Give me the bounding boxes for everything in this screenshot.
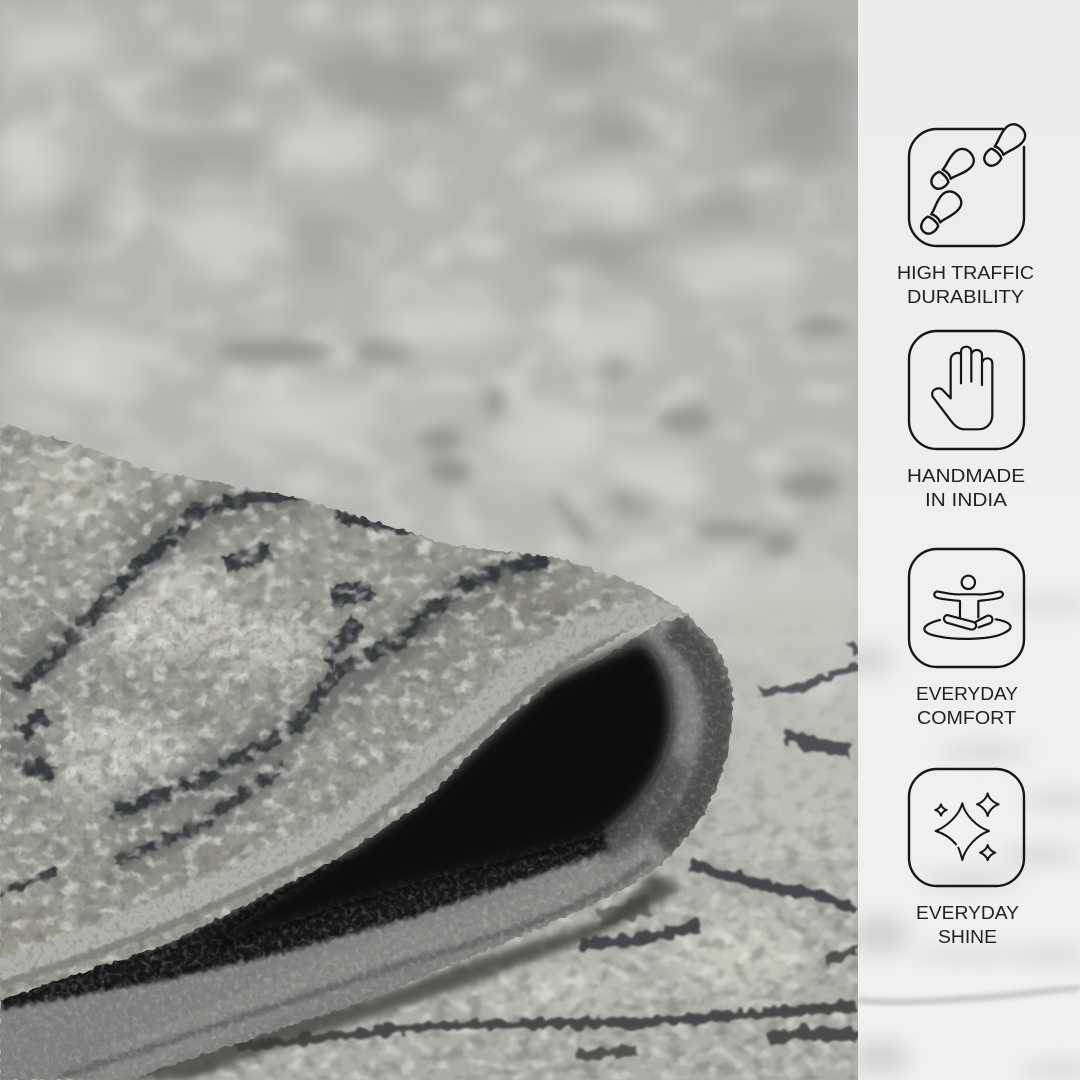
floor area right of the fold [762,724,788,773]
panel: right feature column [843,0,1080,1080]
feature: everyday comfort [909,549,1024,728]
photo: dark inside of the fold [200,640,672,950]
label: everyday comfort: EVERYDAY [916,683,1018,704]
photo: lower fold drop shadow [90,873,680,1080]
icon: meditating person [909,549,1024,667]
icon: footprints [909,120,1029,246]
feature: high traffic durability [897,120,1034,307]
dark pattern lines [0,492,549,893]
rolled lower band [100,844,656,1076]
photo: folded rug underside rim [0,600,740,1080]
label: everyday shine: EVERYDAY [916,902,1019,923]
label: handmade in india: IN INDIA [925,489,1008,510]
icon: sparkles [909,769,1024,886]
label: high traffic durability [897,262,1034,307]
marble streaks [843,599,1080,1077]
label: everyday comfort [916,683,1018,728]
wedge shadow beneath the lip [0,820,610,1010]
label: everyday shine: SHINE [938,926,997,947]
label: handmade in india [907,465,1025,510]
label: high traffic durability: DURABILITY [907,286,1024,307]
broad grey halo around pattern [0,492,549,862]
label: high traffic durability: HIGH TRAFFIC [897,262,1034,283]
floor area in front of the fold [676,860,847,918]
label: everyday shine [916,902,1019,947]
blurred light blotches [0,21,850,630]
right inner rim shading [660,628,719,845]
label: handmade in india: HANDMADE [907,465,1025,486]
photo: folded rug top surface [0,420,740,1010]
icon: hand [909,331,1024,449]
feature: everyday shine [909,769,1024,947]
photo: rug floor background [0,0,860,1080]
label: everyday comfort: COMFORT [917,707,1016,728]
feature: handmade in india [907,331,1025,510]
blurred dark blotches [0,20,860,302]
fold lip edge [0,615,690,972]
light wool patches [8,447,580,890]
